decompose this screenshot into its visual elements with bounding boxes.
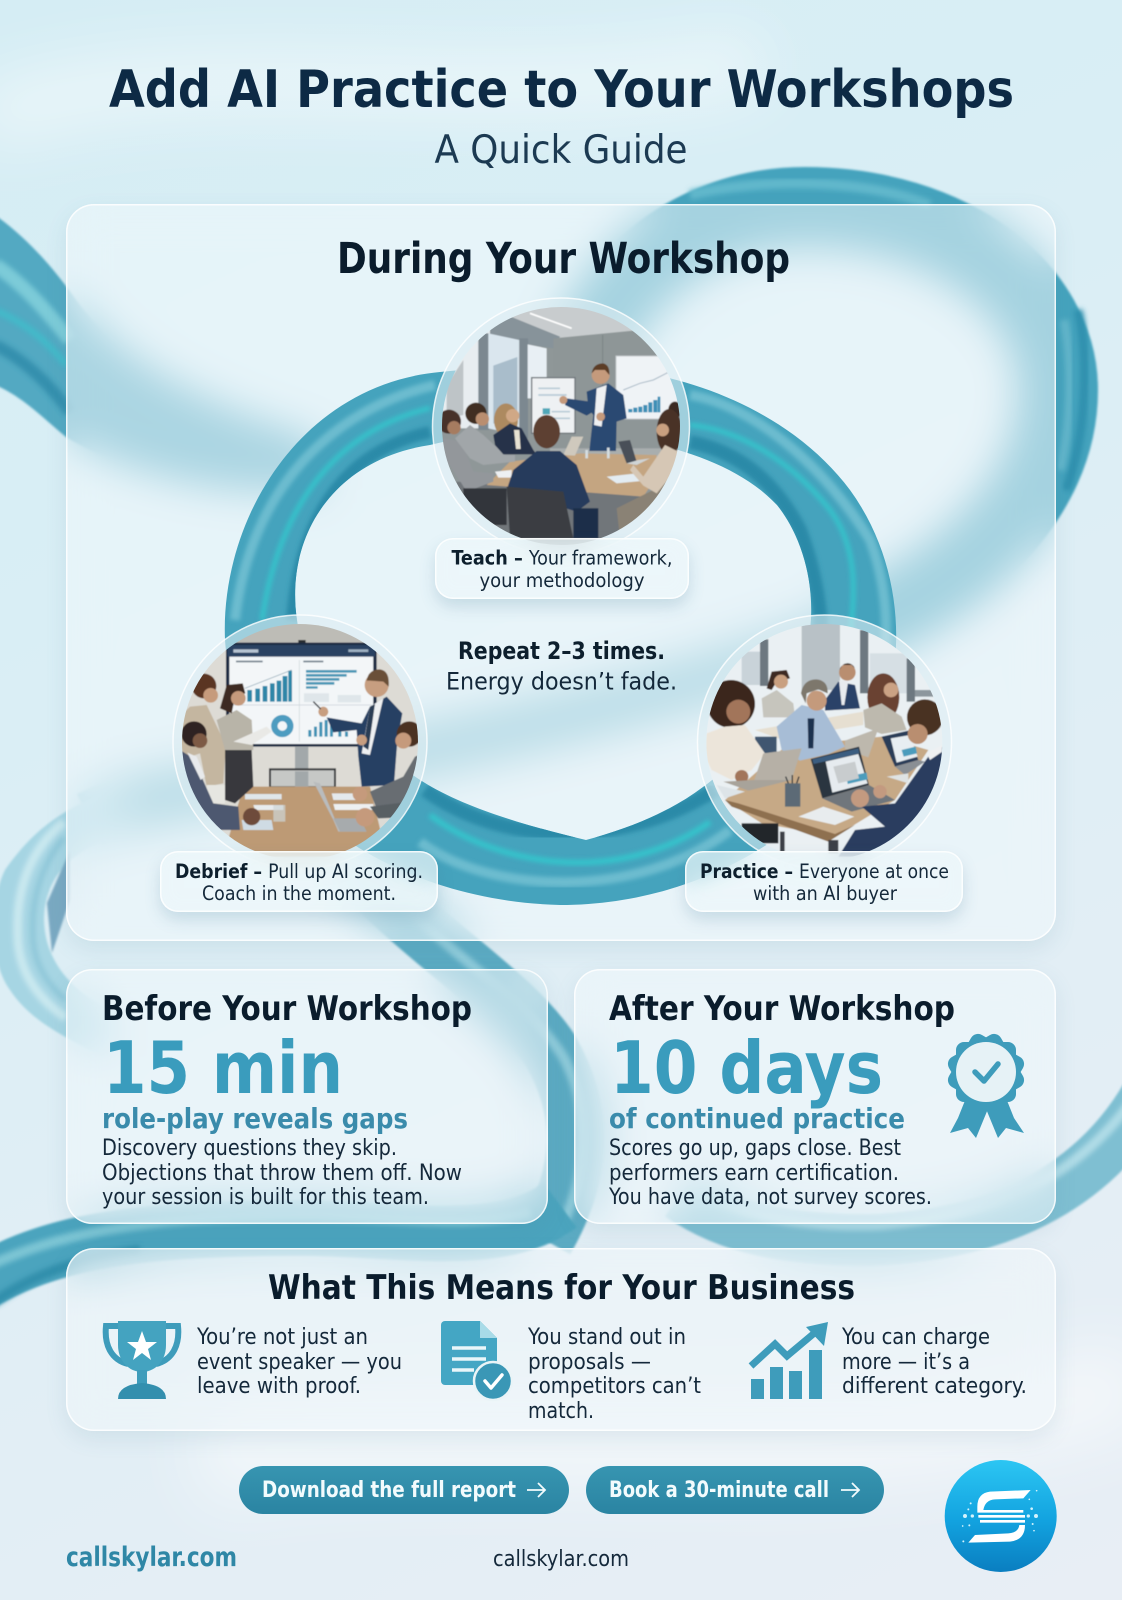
caption: debrief [160, 851, 438, 912]
button: download report [239, 1466, 569, 1514]
stat label: role-play reveals gaps [102, 1102, 408, 1135]
subtitle: A Quick Guide [434, 128, 688, 173]
icon: certification medal [945, 1031, 1027, 1138]
body text: Discovery questions they skip. [102, 1136, 397, 1161]
body text [608, 1136, 932, 1210]
button: download report: Download the full report [262, 1478, 516, 1503]
benefit text 3: different category. [842, 1374, 1027, 1399]
caption: practice: Practice – Everyone at once [700, 860, 949, 883]
benefit text 1: event speaker — you [197, 1350, 402, 1375]
benefit text 2: competitors can’t [528, 1374, 701, 1399]
icon: document check [441, 1321, 512, 1400]
title: Add AI Practice to Your Workshops [109, 60, 1014, 120]
caption: teach [434, 538, 688, 598]
benefit text 2: proposals — [528, 1350, 651, 1375]
heading: during your workshop: During Your Workshop [337, 234, 790, 284]
benefit text 1: leave with proof. [197, 1374, 361, 1399]
heading: before: Before Your Workshop [102, 989, 472, 1029]
stat: 15 min: 15 min [103, 1026, 343, 1110]
heading: business: What This Means for Your Business [268, 1268, 855, 1308]
ribbon: lower left swirl [0, 785, 130, 1060]
stat label: of continued practice [609, 1102, 905, 1135]
ribbon: bottom right band [680, 1075, 1122, 1240]
footer link left: callskylar.com [66, 1542, 237, 1573]
ribbon: centre gap band [340, 850, 583, 1240]
cycle ribbon ring [225, 365, 896, 905]
caption: teach: Teach – Your framework, [451, 546, 672, 569]
centre text: repeat 2-3 times: Repeat 2–3 times. [458, 637, 665, 665]
ribbon: left upper [0, 215, 320, 492]
photo circle: practice [698, 615, 952, 869]
panel: what this means for your business [66, 1248, 1056, 1431]
panel: after your workshop [574, 969, 1056, 1224]
stat: 10 days: 10 days [610, 1026, 883, 1110]
ribbon: top right loop [555, 183, 1084, 630]
benefit text 2 [527, 1325, 701, 1424]
benefit text 2: match. [528, 1399, 594, 1424]
caption: teach: your methodology [479, 568, 644, 592]
body text: your session is built for this team. [102, 1185, 429, 1210]
benefit text 2: You stand out in [527, 1325, 686, 1350]
heading: after: After Your Workshop [609, 989, 955, 1029]
body text: Scores go up, gaps close. Best [609, 1136, 901, 1161]
caption: practice: with an AI buyer [753, 882, 898, 905]
button: book a call: Book a 30-minute call [609, 1478, 829, 1503]
ribbon: diagonal across the middle [90, 630, 850, 820]
panel: during your workshop [66, 204, 1056, 941]
caption: debrief: Debrief – Pull up AI scoring. [175, 860, 423, 883]
benefit text 3 [841, 1325, 1027, 1399]
centre text: repeat 2-3 times [446, 637, 677, 696]
body text: performers earn certification. [609, 1161, 899, 1186]
benefit text 3: You can charge [841, 1325, 990, 1350]
caption: practice [685, 851, 963, 912]
footer link centre: callskylar.com [493, 1547, 629, 1572]
benefit text 1: You’re not just an [196, 1325, 368, 1350]
photo circle: teach [432, 298, 690, 562]
body text: Objections that throw them off. Now [102, 1161, 462, 1186]
benefit text 3: more — it’s a [842, 1350, 970, 1375]
body text [102, 1136, 462, 1210]
body text: You have data, not survey scores. [608, 1185, 932, 1210]
benefit text 1 [196, 1325, 402, 1399]
button: book a call [586, 1466, 884, 1514]
icon: growth chart [751, 1322, 828, 1399]
panel: before your workshop [66, 969, 548, 1224]
logo: Skylar badge [945, 1460, 1057, 1572]
ribbon: bottom left band [0, 1205, 560, 1320]
icon: trophy [106, 1321, 178, 1399]
photo circle: debrief [173, 615, 427, 869]
centre text: repeat 2-3 times: Energy doesn’t fade. [446, 668, 677, 696]
caption: debrief: Coach in the moment. [202, 882, 396, 905]
